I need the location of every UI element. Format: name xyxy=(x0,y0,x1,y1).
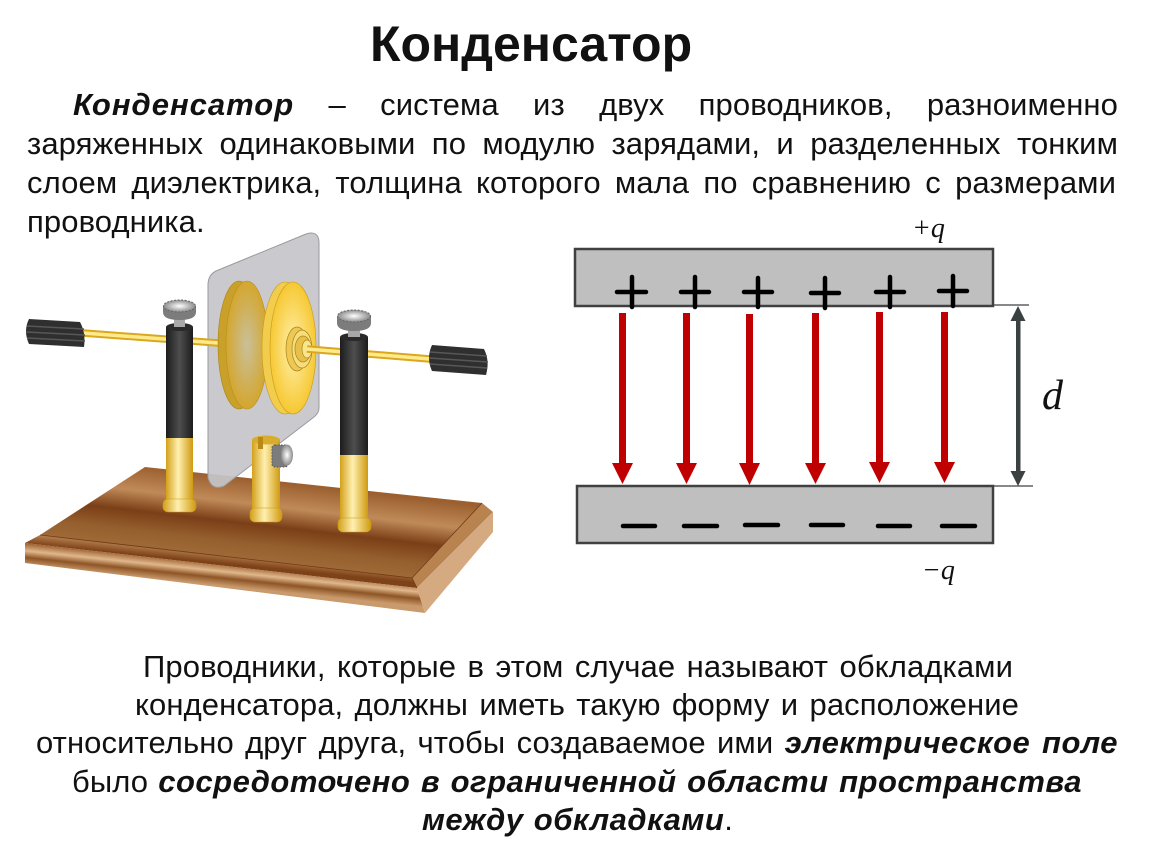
glass dielectric plate xyxy=(208,233,319,487)
left disc plate xyxy=(218,281,268,409)
definition text: проводника. xyxy=(27,204,205,239)
left handle xyxy=(26,319,85,347)
label +q: +q xyxy=(912,213,945,244)
distance lines xyxy=(993,305,1033,486)
explanation text: конденсатора, должны иметь такую форму и расположение xyxy=(135,687,1019,722)
field arrows xyxy=(612,312,955,485)
explanation text: между обкладками. xyxy=(422,802,733,837)
right handle xyxy=(429,345,488,375)
right post xyxy=(337,310,371,532)
left rod xyxy=(83,333,218,343)
explanation text: Проводники, которые в этом случае называют обкладками xyxy=(143,649,1013,684)
explanation text: было сосредоточено в ограниченной области пространства xyxy=(72,764,1082,799)
minus charges xyxy=(623,525,975,526)
definition text xyxy=(27,87,1118,239)
plus charges xyxy=(617,276,967,308)
label d: d xyxy=(1042,373,1064,419)
bottom plate xyxy=(577,486,993,543)
hub on right disc xyxy=(286,327,312,371)
apparatus: capacitor model xyxy=(25,233,493,613)
middle post with screw xyxy=(250,436,293,522)
right rod xyxy=(307,349,430,359)
top plate xyxy=(575,249,993,306)
right disc plate xyxy=(262,282,316,414)
distance arrow xyxy=(1010,306,1026,486)
explanation text: относительно друг друга, чтобы создаваемое ими электрическое поле xyxy=(36,725,1118,760)
definition text: Конденсатор – система из двух проводников, разноименно xyxy=(73,87,1118,122)
title: Конденсатор xyxy=(370,16,692,72)
left post xyxy=(163,300,196,512)
definition text: слоем диэлектрика, толщина которого мала по сравнению с размерами xyxy=(27,165,1116,200)
label −q: −q xyxy=(922,555,955,586)
parallel plate diagram xyxy=(575,213,1064,586)
definition text: заряженных одинаковыми по модулю зарядами, и разделенных тонким xyxy=(27,126,1118,161)
explanation text xyxy=(36,649,1118,837)
wooden base xyxy=(25,467,493,613)
